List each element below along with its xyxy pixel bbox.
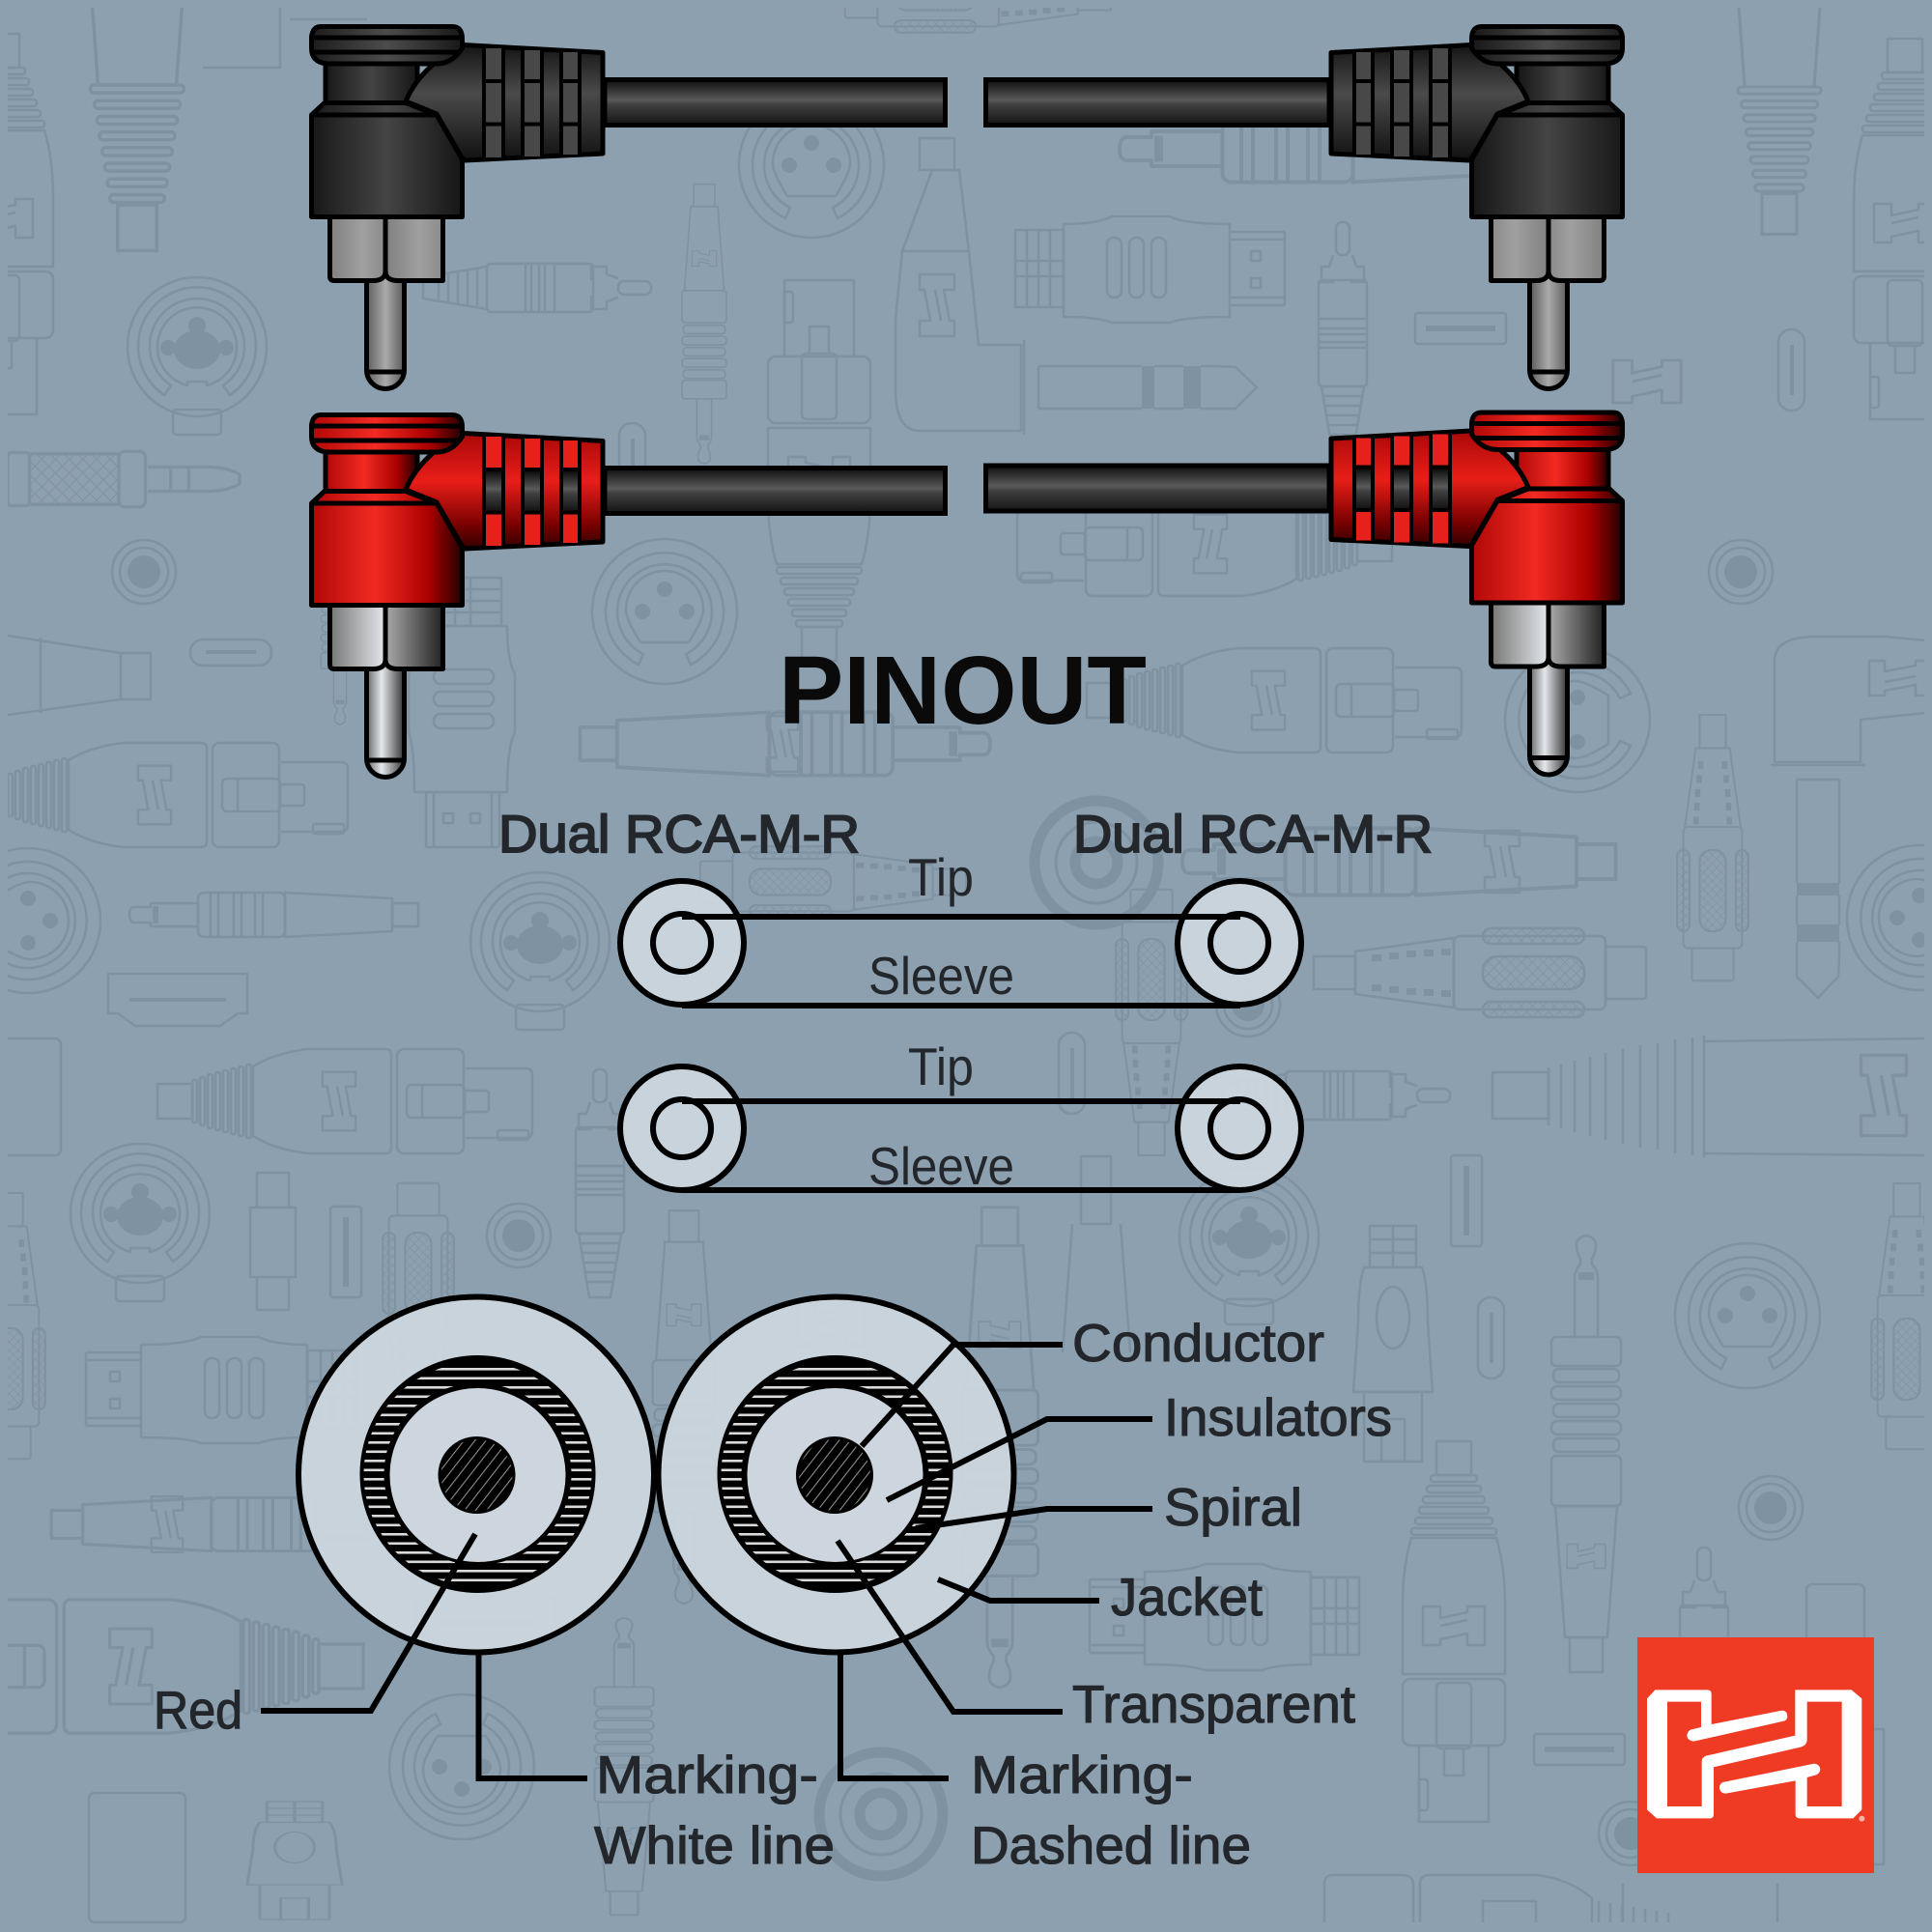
- heading: right connector type: Dual RCA-M-R: [1073, 804, 1433, 864]
- label: jacket: Jacket: [1111, 1567, 1263, 1627]
- label: transparent: Transparent: [1072, 1674, 1355, 1734]
- connector: top-left black RCA plug with cable: [311, 27, 945, 388]
- connector: lower-left red RCA plug with cable: [311, 415, 945, 777]
- label: sleeve: Sleeve: [868, 1136, 1014, 1196]
- label: red: Red: [154, 1680, 242, 1740]
- label: marking white line: White line: [594, 1815, 835, 1875]
- heading: left connector type: Dual RCA-M-R: [498, 804, 860, 864]
- connector: lower-right red RCA plug with cable: [985, 412, 1623, 775]
- pinout diagram: first channel: [620, 847, 1301, 1006]
- label: marking dashed line: [971, 1745, 1251, 1875]
- label: sleeve: Sleeve: [868, 946, 1014, 1006]
- label: insulators: Insulators: [1164, 1387, 1392, 1447]
- label: marking white line: Marking-: [596, 1745, 818, 1804]
- leader lines: [261, 1345, 1152, 1778]
- label: conductor: Conductor: [1072, 1313, 1324, 1373]
- label: tip: Tip: [908, 1037, 974, 1096]
- pinout diagram: second channel: [620, 1037, 1301, 1196]
- cable cross-section: right: [659, 1296, 1014, 1652]
- label: marking dashed line: Marking-: [971, 1745, 1193, 1804]
- label: marking dashed line: Dashed line: [971, 1815, 1251, 1875]
- connector: top-right black RCA plug with cable: [985, 27, 1623, 388]
- cable cross-section: left: [298, 1296, 654, 1652]
- title: PINOUT: [779, 637, 1147, 745]
- label: marking white line: [594, 1745, 835, 1875]
- label: tip: Tip: [908, 847, 974, 907]
- logo: Hosa: [1637, 1637, 1874, 1873]
- label: spiral: Spiral: [1164, 1477, 1302, 1537]
